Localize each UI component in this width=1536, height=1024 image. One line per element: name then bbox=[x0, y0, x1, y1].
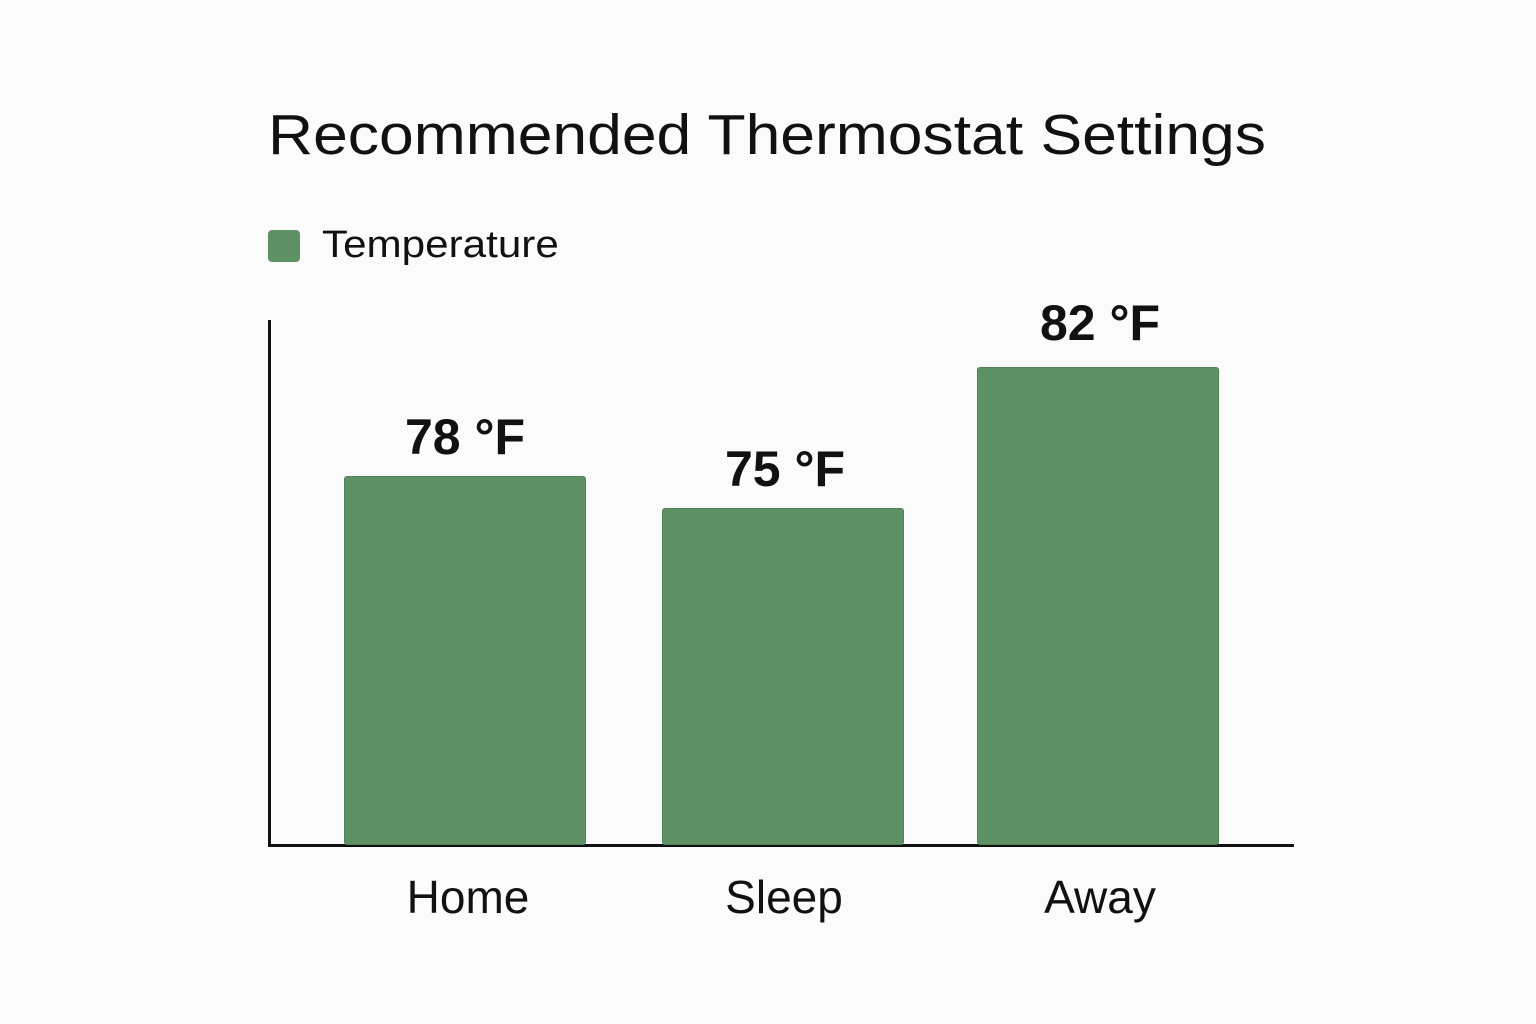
y axis bbox=[268, 320, 271, 847]
label: Sleep: Sleep bbox=[725, 871, 843, 923]
value: Home: 78 °F bbox=[405, 409, 525, 465]
legend bbox=[268, 224, 559, 266]
title: Recommended Thermostat Settings bbox=[268, 103, 1266, 167]
bar: Sleep bbox=[662, 508, 904, 845]
label: Home: Home bbox=[407, 871, 529, 923]
bar: Home bbox=[344, 476, 586, 845]
label: Away: Away bbox=[1044, 871, 1156, 923]
legend swatch bbox=[268, 230, 300, 262]
value: Away: 82 °F bbox=[1040, 295, 1160, 351]
x axis bbox=[268, 844, 1294, 847]
legend label: Temperature bbox=[322, 224, 559, 266]
value: Sleep: 75 °F bbox=[725, 441, 845, 497]
bar: Away bbox=[977, 367, 1219, 845]
